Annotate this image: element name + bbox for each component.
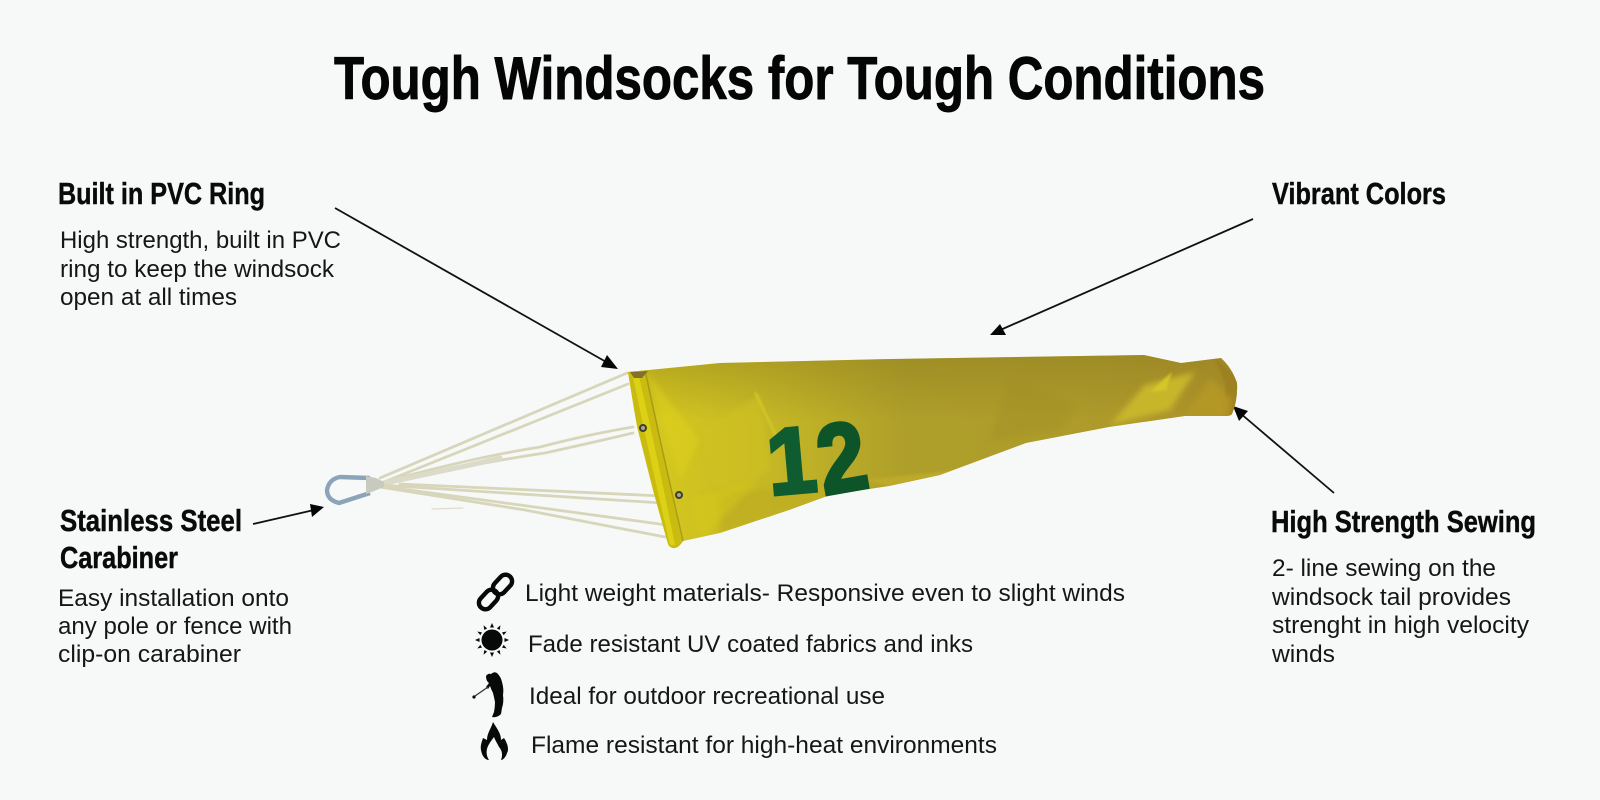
text: outdoor use: Ideal for outdoor recreational use (529, 683, 885, 710)
callout: built in PVC ring (58, 176, 341, 311)
text block: carabiner description: any pole or fence with (58, 613, 292, 640)
feature: flame resistant (481, 722, 997, 760)
heading: stainless steel carabiner: Stainless Steel (60, 503, 242, 538)
heading: high strength sewing: High Strength Sewing (1271, 504, 1536, 539)
feature list (472, 572, 1125, 760)
text block: PVC ring description: High strength, built in PVC (60, 227, 341, 254)
callout: vibrant colors heading: Vibrant Colors (1272, 176, 1446, 211)
icon: chain link (476, 572, 515, 612)
cords (380, 373, 667, 537)
text block: sewing description: strenght in high velocity (1272, 612, 1529, 639)
feature: light weight (476, 572, 1125, 612)
text block: PVC ring description (60, 227, 341, 311)
sock body (625, 350, 1248, 549)
number 12 on the sock: 1 (763, 408, 820, 516)
text block: sewing description: winds (1271, 641, 1335, 668)
text block: PVC ring description: open at all times (60, 284, 237, 311)
text block: carabiner description: clip-on carabiner (58, 641, 241, 668)
stray highlight (432, 508, 463, 509)
icon: sun (475, 623, 509, 657)
icon: golfer (472, 672, 503, 717)
text block: carabiner description: Easy installation onto (58, 585, 289, 612)
text: light weight: Light weight materials- Responsive even to slight winds (525, 580, 1125, 607)
callout: stainless steel carabiner (58, 503, 292, 668)
text: UV resistant: Fade resistant UV coated fabrics and inks (528, 631, 973, 658)
arrow: vibrant colors (990, 219, 1253, 335)
text block: sewing description (1271, 555, 1529, 668)
eyelets (640, 425, 682, 498)
heading: stainless steel carabiner (60, 503, 242, 575)
feature: outdoor use (472, 672, 885, 717)
heading: built in PVC ring: Built in PVC Ring (58, 176, 265, 211)
number 12 on the sock (763, 399, 875, 516)
windsock illustration (327, 350, 1248, 549)
text block: PVC ring description: ring to keep the windsock (60, 256, 335, 283)
title: Tough Windsocks for Tough Conditions (334, 45, 1265, 112)
number 12 on the sock: 2 (809, 399, 875, 516)
arrow: high strength sewing (1233, 406, 1334, 493)
grommet and ring shading (630, 371, 648, 378)
arrow: PVC ring (335, 208, 618, 369)
text block: carabiner description (58, 585, 292, 668)
text block: sewing description: windsock tail provides (1271, 584, 1511, 611)
feature: UV resistant (475, 623, 973, 658)
text: flame resistant: Flame resistant for high-heat environments (531, 732, 997, 759)
heading: stainless steel carabiner: Carabiner (60, 540, 178, 575)
callout: high strength sewing (1271, 504, 1536, 668)
carabiner (327, 476, 384, 503)
icon: flame (481, 722, 508, 760)
text block: sewing description: 2- line sewing on the (1272, 555, 1496, 582)
arrow: carabiner (253, 504, 324, 524)
